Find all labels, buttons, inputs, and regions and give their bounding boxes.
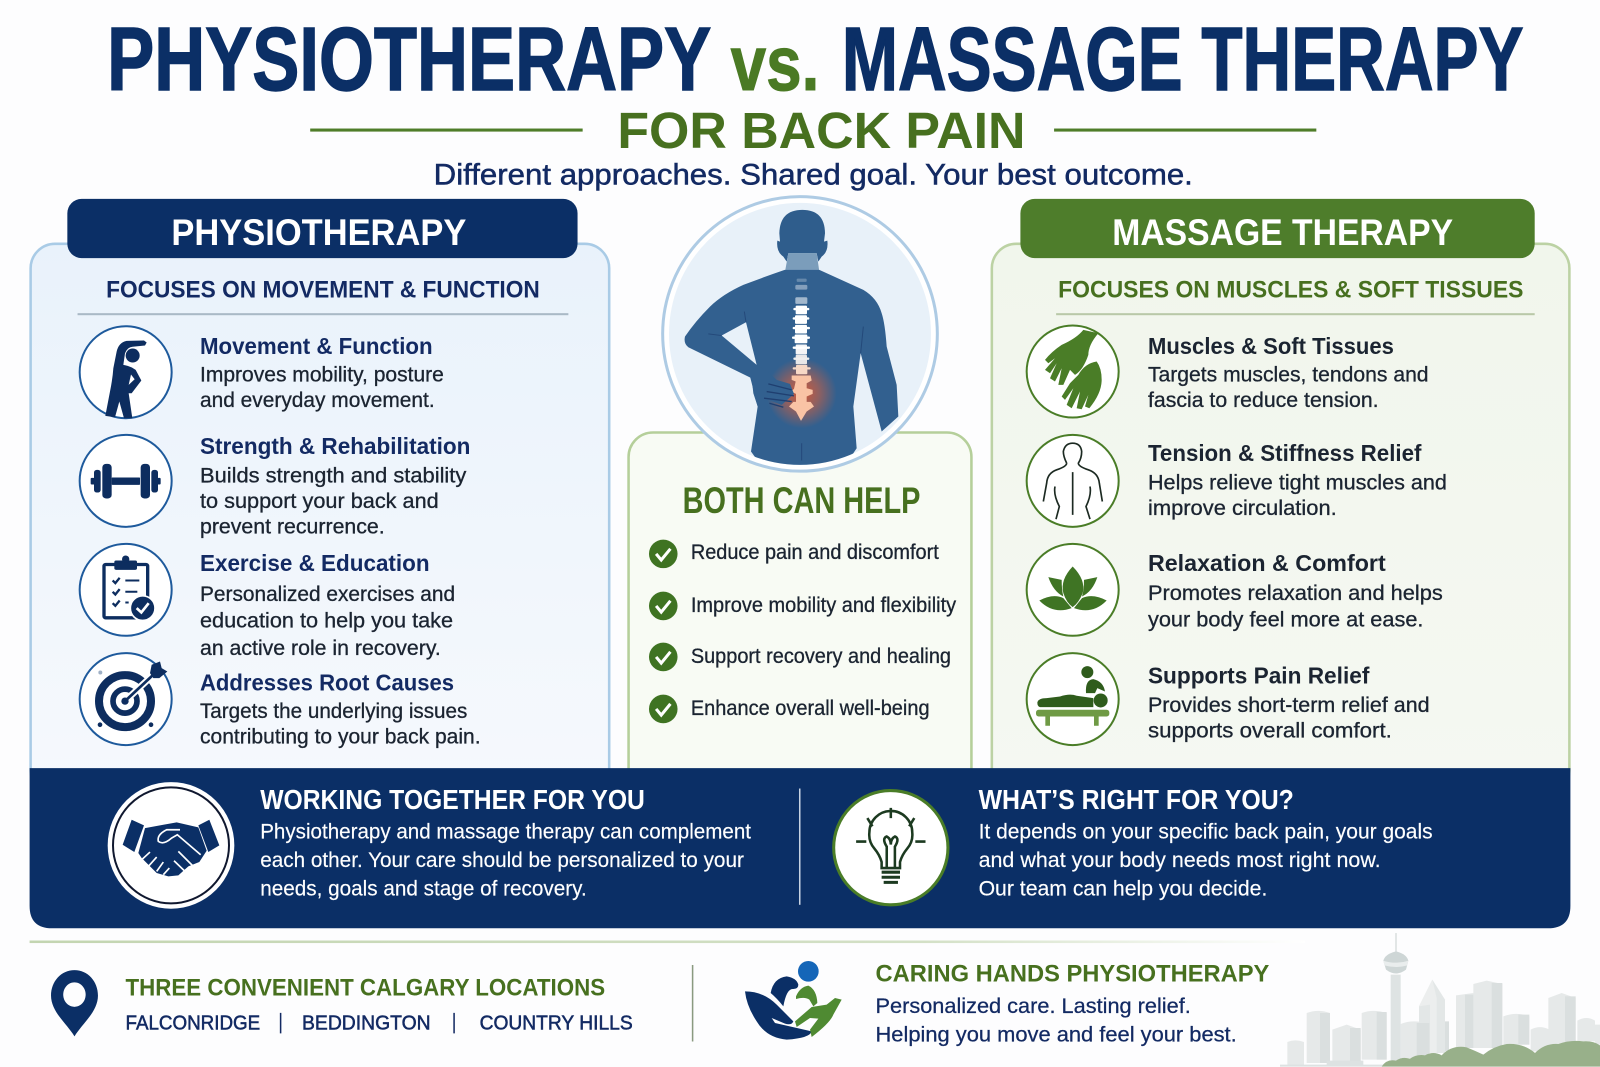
panel: physiotherapy bbox=[31, 199, 609, 795]
item: supports pain relief: Provides short-term relief and bbox=[1148, 694, 1430, 717]
physiotherapy header pill: PHYSIOTHERAPY bbox=[171, 212, 466, 253]
item: strength and rehabilitation: Builds strength and stability bbox=[200, 464, 467, 487]
item: supports pain relief: Supports Pain Relief bbox=[1148, 662, 1370, 688]
item: relaxation and comfort: Relaxation & Comfort bbox=[1148, 550, 1386, 576]
benefit: reduce pain bbox=[649, 540, 939, 568]
locations text: THREE CONVENIENT CALGARY LOCATIONS bbox=[126, 975, 605, 1002]
brand text: CARING HANDS PHYSIOTHERAPY bbox=[876, 960, 1269, 987]
item: movement and function bbox=[200, 333, 444, 412]
benefit: improve mobility bbox=[649, 592, 957, 620]
item: exercise and education: Personalized exercises and bbox=[200, 583, 455, 606]
item: tension and stiffness relief: improve circulation. bbox=[1148, 497, 1337, 520]
item: tension and stiffness relief: Tension & Stiffness Relief bbox=[1148, 440, 1422, 466]
item: muscles and soft tissues bbox=[1148, 333, 1429, 412]
massage therapy header pill bbox=[1020, 199, 1535, 258]
physiotherapy focus heading: FOCUSES ON MOVEMENT & FUNCTION bbox=[106, 276, 540, 303]
skyline bbox=[1280, 933, 1600, 1067]
icon: back outline bbox=[1027, 435, 1119, 527]
what's right for you text bbox=[979, 784, 1433, 901]
item: relaxation and comfort: Promotes relaxation and helps bbox=[1148, 582, 1443, 605]
item: muscles and soft tissues: Muscles & Soft Tissues bbox=[1148, 333, 1394, 359]
item: movement and function: and everyday movement. bbox=[200, 389, 435, 412]
item: tension and stiffness relief: Helps relieve tight muscles and bbox=[1148, 472, 1447, 495]
brand text bbox=[876, 960, 1269, 1046]
subtitle: for back pain: FOR BACK PAIN bbox=[617, 102, 1026, 159]
spine bbox=[789, 279, 814, 421]
gap under raised arm bbox=[722, 322, 757, 365]
item: supports pain relief bbox=[1148, 662, 1430, 743]
item: exercise and education: education to help you take bbox=[200, 609, 453, 632]
icon: clipboard checklist bbox=[80, 544, 172, 636]
item: muscles and soft tissues: Targets muscles, tendons and bbox=[1148, 364, 1429, 387]
item: exercise and education bbox=[200, 550, 455, 660]
tagline: Different approaches. Shared goal. Your best outcome. bbox=[434, 159, 1193, 192]
working together text bbox=[260, 784, 751, 901]
benefit: support recovery bbox=[649, 643, 951, 671]
item: relaxation and comfort bbox=[1148, 550, 1443, 631]
icon: lightbulb bbox=[834, 791, 948, 905]
brand text: Personalized care. Lasting relief. bbox=[876, 994, 1191, 1018]
physiotherapy header pill bbox=[67, 199, 578, 258]
hand bbox=[750, 376, 794, 406]
item: movement and function: Improves mobility, posture bbox=[200, 364, 444, 387]
subtitle: for back pain bbox=[310, 102, 1316, 159]
item: muscles and soft tissues: fascia to reduce tension. bbox=[1148, 389, 1379, 412]
benefit: reduce pain: Reduce pain and discomfort bbox=[691, 541, 939, 564]
working together text: each other. Your care should be personalized to your bbox=[260, 848, 744, 872]
pain glow bbox=[769, 360, 835, 426]
item: strength and rehabilitation bbox=[200, 433, 470, 538]
item: exercise and education: an active role in recovery. bbox=[200, 637, 441, 660]
item: addresses root causes: Targets the underlying issues bbox=[200, 700, 467, 723]
item: movement and function: Movement & Function bbox=[200, 333, 433, 359]
icon: handshake bbox=[108, 782, 234, 909]
working together text: WORKING TOGETHER FOR YOU bbox=[260, 784, 645, 815]
locations text: FALCONRIDGE bbox=[126, 1012, 260, 1034]
item: addresses root causes: contributing to your back pain. bbox=[200, 726, 481, 749]
massage focus heading: FOCUSES ON MUSCLES & SOFT TISSUES bbox=[1058, 276, 1523, 303]
panel: massage therapy bbox=[992, 199, 1569, 795]
item: addresses root causes bbox=[200, 670, 481, 749]
locations text: BEDDINGTON bbox=[302, 1012, 431, 1034]
massage therapy header pill: MASSAGE THERAPY bbox=[1112, 212, 1453, 253]
item: strength and rehabilitation: Strength & Rehabilitation bbox=[200, 433, 470, 459]
icon: stretching person bbox=[80, 326, 172, 418]
benefit: enhance well-being bbox=[649, 695, 930, 723]
item: relaxation and comfort: your body feel more at ease. bbox=[1148, 608, 1423, 631]
illustration: back with lower spine pain bbox=[663, 197, 937, 473]
working together text: needs, goals and stage of recovery. bbox=[260, 877, 587, 901]
title bbox=[107, 10, 1523, 110]
both can help heading: BOTH CAN HELP bbox=[683, 480, 920, 521]
item: strength and rehabilitation: prevent recurrence. bbox=[200, 516, 385, 538]
icon: caring hands logo bbox=[745, 961, 842, 1040]
icon: dumbbell bbox=[80, 435, 172, 527]
brand text: Helping you move and feel your best. bbox=[876, 1023, 1237, 1046]
panel: both can help bbox=[629, 433, 971, 795]
item: addresses root causes: Addresses Root Causes bbox=[200, 670, 454, 696]
benefit: improve mobility: Improve mobility and flexibility bbox=[691, 594, 957, 617]
icon: target and arrow bbox=[80, 653, 172, 745]
locations text bbox=[126, 975, 633, 1034]
item: tension and stiffness relief bbox=[1148, 440, 1447, 520]
what's right for you text: WHAT’S RIGHT FOR YOU? bbox=[979, 784, 1294, 815]
what's right for you text: It depends on your specific back pain, your goals bbox=[979, 820, 1433, 844]
title: PHYSIOTHERAPY bbox=[107, 10, 711, 110]
what's right for you text: and what your body needs most right now. bbox=[979, 848, 1381, 872]
item: supports pain relief: supports overall comfort. bbox=[1148, 720, 1392, 743]
title: vs. bbox=[731, 21, 819, 107]
item: strength and rehabilitation: to support your back and bbox=[200, 490, 439, 513]
working together text: Physiotherapy and massage therapy can complement bbox=[260, 820, 751, 844]
icon: location pin bbox=[51, 970, 98, 1036]
locations text: COUNTRY HILLS bbox=[480, 1012, 633, 1034]
icon: lotus bbox=[1027, 544, 1119, 636]
icon: massage table bbox=[1027, 653, 1119, 745]
benefit: enhance well-being: Enhance overall well-being bbox=[691, 697, 930, 720]
what's right for you text: Our team can help you decide. bbox=[979, 877, 1267, 901]
icon: hands bbox=[1027, 326, 1119, 418]
benefit: support recovery: Support recovery and healing bbox=[691, 645, 951, 668]
item: exercise and education: Exercise & Education bbox=[200, 550, 430, 576]
body silhouette bbox=[685, 210, 898, 473]
bottom band bbox=[30, 768, 1570, 928]
